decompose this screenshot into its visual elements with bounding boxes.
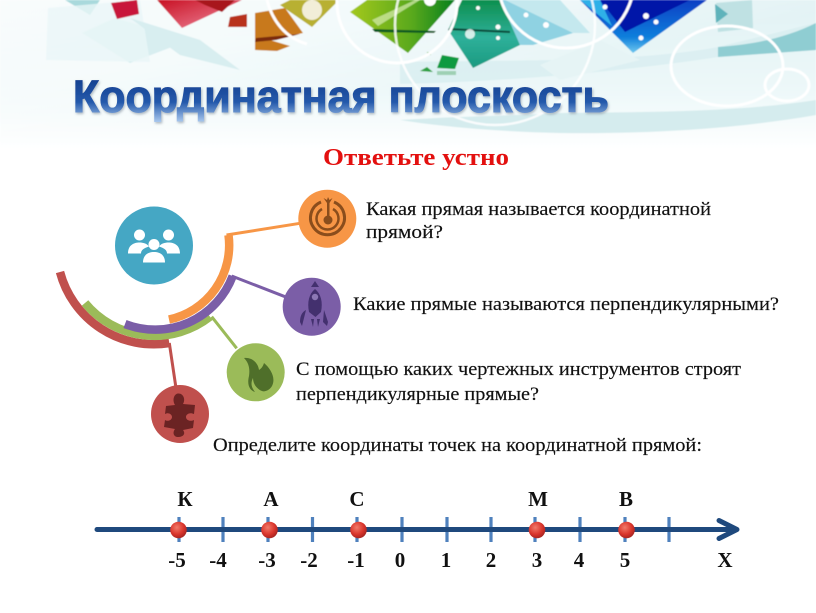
red shard	[157, 0, 242, 28]
question 1 text	[366, 199, 711, 243]
small green squares	[437, 55, 459, 69]
scale numbers: 2	[486, 548, 496, 572]
question 3 text	[296, 359, 742, 405]
point letters: М	[528, 487, 548, 511]
icon: target in orange circle	[298, 190, 356, 248]
scale numbers	[168, 548, 733, 572]
scale numbers: Х	[717, 548, 733, 572]
scale numbers: -3	[258, 548, 276, 572]
point letters	[177, 487, 633, 511]
icon: people in blue circle	[115, 206, 193, 284]
points on the line	[170, 522, 635, 538]
pink square	[111, 0, 139, 19]
icon: puzzle piece in red circle	[151, 385, 209, 443]
scale numbers: -1	[347, 548, 365, 572]
tick marks	[179, 517, 669, 542]
question 1 text: прямой?	[366, 222, 443, 243]
orange shard	[255, 8, 303, 51]
blue shard	[580, 0, 707, 53]
title: Координатная плоскость	[73, 71, 609, 122]
scale numbers: 5	[620, 548, 630, 572]
scale numbers: 4	[574, 548, 585, 572]
icon: flame in green circle	[227, 343, 285, 401]
point letters: А	[263, 487, 279, 511]
question 4 text: Определите координаты точек на координатной прямой:	[213, 435, 702, 456]
scale numbers: -2	[300, 548, 318, 572]
question 2 text: Какие прямые называются перпендикулярными?	[353, 294, 779, 315]
scale numbers: -5	[168, 548, 186, 572]
number line	[97, 487, 737, 572]
scale numbers: 1	[441, 548, 451, 572]
heading: answer orally: Ответьте устно	[323, 145, 509, 171]
question 1 text: Какая прямая называется координатной	[366, 199, 711, 220]
point letters: В	[619, 487, 633, 511]
point letters: К	[177, 487, 193, 511]
green diamond	[350, 0, 455, 53]
teal shard	[448, 0, 520, 68]
scale numbers: 3	[532, 548, 542, 572]
scale numbers: -4	[209, 548, 227, 572]
point letters: С	[349, 487, 365, 511]
connector lines	[169, 223, 300, 386]
concentric arcs	[60, 235, 233, 344]
yellow shard	[280, 0, 339, 27]
question 3 text: С помощью каких чертежных инструментов строят	[296, 359, 742, 380]
white rings	[267, 0, 809, 125]
scale numbers: 0	[395, 548, 405, 572]
question 3 text: перпендикулярные прямые?	[296, 384, 539, 405]
axis arrow	[97, 520, 737, 538]
background header banner	[0, 0, 816, 150]
sparkles	[424, 0, 658, 40]
icon: rocket in purple circle	[283, 278, 341, 336]
radial diagram	[60, 190, 356, 443]
